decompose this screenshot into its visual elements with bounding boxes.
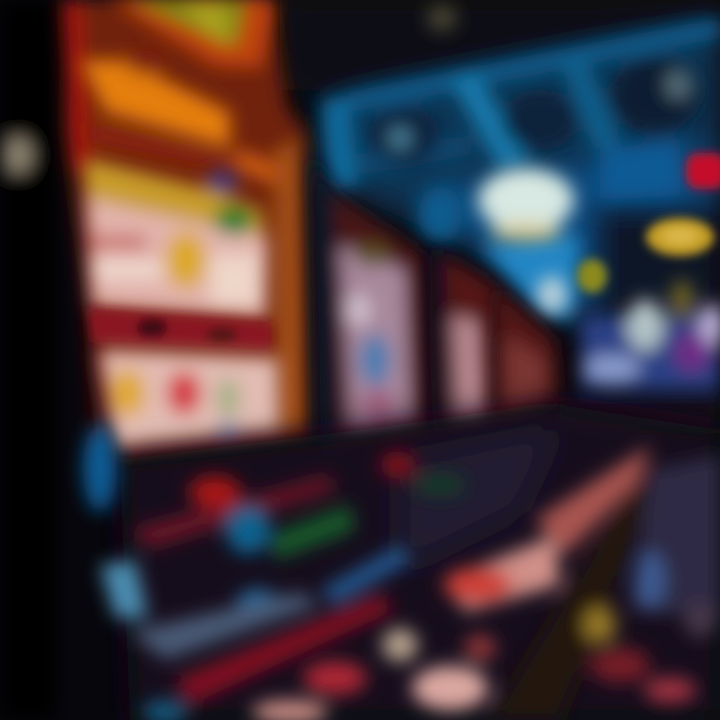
floor carpet highlights	[252, 445, 720, 720]
red band	[88, 308, 272, 350]
slot machine 1	[62, 0, 312, 456]
machine base buttons	[83, 424, 466, 720]
machine topper	[80, 0, 280, 185]
slot machine 2	[310, 150, 432, 450]
blue ceiling beams	[322, 5, 720, 320]
floor and aisle	[120, 405, 720, 720]
machine frame	[62, 0, 312, 456]
upper reels	[84, 158, 268, 318]
red and yellow signs	[577, 153, 720, 293]
slot machine 3	[430, 250, 495, 430]
far right machines and lights	[537, 276, 720, 433]
ceiling and blue lights	[280, 0, 720, 320]
white ceiling light	[478, 168, 574, 241]
lower reels	[100, 350, 280, 448]
left wall and lamp	[0, 0, 56, 720]
slot machines in the distance	[495, 285, 560, 420]
